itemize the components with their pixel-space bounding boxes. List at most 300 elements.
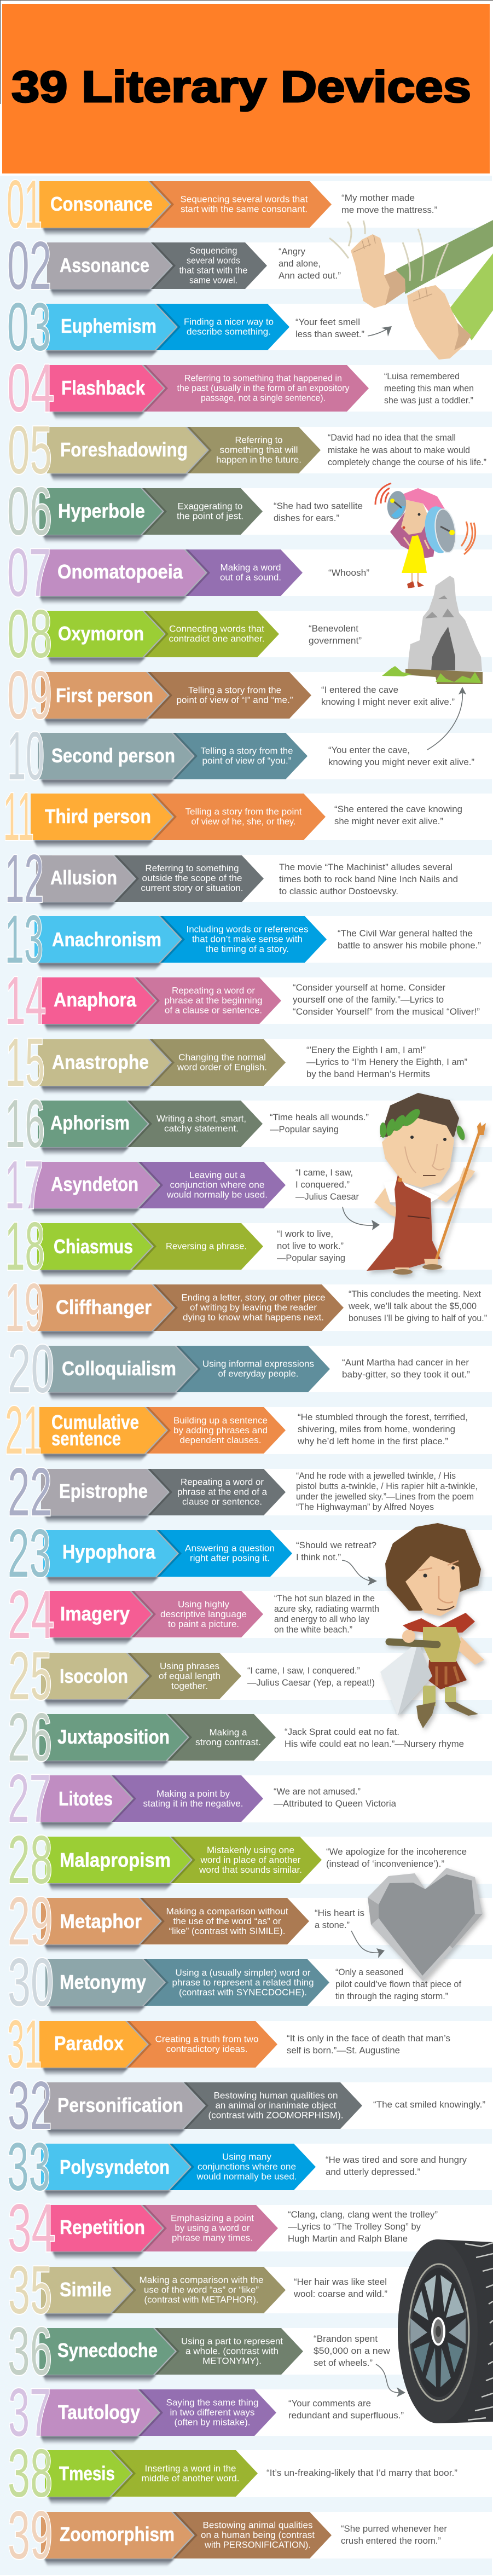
arrow: cave bbox=[427, 687, 466, 750]
term arrow 02 bbox=[47, 242, 173, 289]
description arrow 17 bbox=[137, 1162, 286, 1208]
row 04: Flashback bbox=[7, 351, 474, 426]
quote 33: “He was tired and sore and hungry bbox=[326, 2155, 467, 2165]
description arrow 20: of everyday people. bbox=[218, 1368, 299, 1379]
description arrow 04: passage, not a single sentence). bbox=[201, 393, 326, 403]
description arrow 21: Building up a sentence bbox=[173, 1415, 268, 1426]
quote 25: —Julius Caesar (Yep, a repeat!) bbox=[247, 1677, 375, 1688]
quote 03: “Your feet smell bbox=[295, 317, 360, 327]
quote 04: she was just a toddler.” bbox=[384, 395, 473, 406]
row 20: Colloquialism bbox=[8, 1332, 470, 1407]
number 37: 37 bbox=[8, 2375, 51, 2451]
term arrow 12 bbox=[36, 855, 136, 902]
row 17: Asyndeton bbox=[5, 1148, 359, 1223]
row 33: Polysyndeton bbox=[7, 2129, 467, 2205]
row 35: Simile bbox=[8, 2253, 387, 2328]
term arrow 24: Imagery bbox=[60, 1602, 130, 1625]
description arrow 08: Connecting words that bbox=[169, 624, 264, 634]
term arrow 24 bbox=[49, 1591, 153, 1637]
quote 27 bbox=[274, 1786, 397, 1809]
description arrow 09 bbox=[146, 672, 311, 719]
description arrow 36: a whole. (contrast with bbox=[185, 2346, 279, 2357]
description arrow 31: contradictory ideas. bbox=[166, 2044, 247, 2054]
description arrow 11: Telling a story from the point bbox=[185, 807, 302, 817]
quote 08 bbox=[309, 623, 362, 646]
description arrow 15: Changing the normal bbox=[178, 1052, 266, 1063]
quote 34: “Clang, clang, clang went the trolley” bbox=[288, 2209, 438, 2220]
quote 22: “And he rode with a jewelled twinkle, / His bbox=[296, 1471, 456, 1481]
term arrow 37 bbox=[37, 2389, 160, 2436]
quote 23: “Should we retreat? bbox=[296, 1540, 376, 1550]
description arrow 30: (contrast with SYNECDOCHE). bbox=[179, 1987, 307, 1998]
row 11: Third person: 11 bbox=[3, 779, 34, 855]
quote 30 bbox=[335, 1967, 461, 2001]
quote 22: pistol butts a-twinkle, / His rapier hilt a-twinkle, bbox=[296, 1481, 478, 1491]
quote 04: “Luisa remembered bbox=[384, 371, 460, 381]
quote 01: “My mother made bbox=[341, 193, 415, 203]
description arrow 29: “like” (contrast with SIMILE). bbox=[169, 1926, 286, 1936]
number 17: 17 bbox=[5, 1148, 43, 1223]
term arrow 10: Second person bbox=[51, 744, 175, 767]
description arrow 21: dependent clauses. bbox=[179, 1435, 262, 1445]
quote 17: —Julius Caesar bbox=[295, 1191, 359, 1202]
quote 34: Hugh Martin and Ralph Blane bbox=[288, 2233, 408, 2244]
description arrow 28 bbox=[169, 1837, 322, 1883]
quote 21: why he’d left home in the first place.” bbox=[297, 1436, 448, 1446]
quote 15: by the band Herman’s Hermits bbox=[306, 1069, 430, 1079]
row 34: Repetition bbox=[8, 2191, 438, 2266]
quote 03: less than sweet.” bbox=[295, 329, 364, 339]
row 28: Malapropism bbox=[8, 1822, 467, 1898]
quote 35 bbox=[293, 2277, 387, 2299]
illustration: soldier with sword bbox=[380, 1523, 484, 1728]
quote 12: The movie “The Machinist” alludes several bbox=[279, 862, 453, 872]
description arrow 25 bbox=[126, 1653, 241, 1699]
quote 20: “Aunt Martha had cancer in her bbox=[342, 1357, 469, 1368]
quote 29 bbox=[315, 1908, 364, 1930]
description arrow 01: Sequencing several words that bbox=[181, 194, 308, 205]
quote 10 bbox=[328, 745, 474, 767]
quote 27: “We are not amused.” bbox=[274, 1786, 361, 1797]
description arrow 03 bbox=[154, 304, 289, 350]
quote 05: completely change the course of his life.” bbox=[328, 457, 486, 467]
quote 17: I conquered.” bbox=[295, 1179, 350, 1190]
quote 16 bbox=[270, 1112, 369, 1134]
description arrow 14: of a clause or sentence. bbox=[165, 1005, 262, 1016]
quote 15: —Lyrics to “I’m Henery the Eighth, I am” bbox=[306, 1057, 467, 1067]
term arrow 08 bbox=[45, 611, 166, 657]
quote 39: crush entered the room.” bbox=[341, 2536, 441, 2546]
description arrow 15: word order of English. bbox=[177, 1062, 267, 1073]
row 15: Anastrophe bbox=[5, 1025, 467, 1101]
description arrow 26: strong contrast. bbox=[195, 1737, 261, 1747]
number 18: 18 bbox=[5, 1209, 45, 1284]
description arrow 12: Referring to something bbox=[146, 863, 239, 873]
row 21: Cumulative sentence bbox=[5, 1393, 468, 1468]
description arrow 30: phrase to represent a related thing bbox=[172, 1977, 314, 1988]
term arrow 25 bbox=[41, 1653, 149, 1699]
term arrow 09 bbox=[41, 672, 170, 719]
description arrow 13 bbox=[159, 916, 327, 963]
number 23: 23 bbox=[8, 1516, 51, 1591]
description arrow 03: Finding a nicer way to bbox=[184, 316, 274, 327]
description arrow 22: phrase at the end of a bbox=[177, 1486, 268, 1497]
quote 37: redundant and superfluous.” bbox=[288, 2410, 404, 2421]
description arrow 33: would normally be used. bbox=[196, 2172, 297, 2181]
number 35: 35 bbox=[8, 2253, 52, 2328]
quote 05 bbox=[328, 432, 486, 467]
quote 12 bbox=[279, 862, 458, 896]
row 07: Onomatopoeia bbox=[7, 535, 369, 611]
term arrow 29 bbox=[41, 1898, 162, 1944]
quote 35: “Her hair was like steel bbox=[294, 2277, 387, 2287]
row 24: Imagery bbox=[8, 1577, 379, 1653]
quote 29: “His heart is bbox=[315, 1908, 364, 1918]
quote 36: “Brandon spent bbox=[314, 2334, 378, 2344]
description arrow 32 bbox=[182, 2082, 362, 2129]
number 12: 12 bbox=[5, 841, 44, 917]
quote 36 bbox=[314, 2334, 391, 2368]
arrow: tire bbox=[376, 2364, 405, 2397]
description arrow 37 bbox=[137, 2389, 276, 2436]
row 31: Paradox bbox=[7, 2007, 450, 2082]
row 09: First person bbox=[7, 658, 455, 733]
term arrow 19 bbox=[37, 1284, 175, 1331]
term arrow 39: Zoomorphism bbox=[60, 2523, 175, 2545]
quote 12: to classic author Dostoevsky. bbox=[279, 886, 398, 896]
description arrow 24 bbox=[130, 1591, 263, 1637]
term arrow 32: Personification bbox=[57, 2094, 183, 2116]
description arrow 06: Exaggerating to bbox=[177, 501, 243, 511]
row 39: Zoomorphism bbox=[8, 2498, 447, 2573]
row 22: Epistrophe bbox=[8, 1455, 478, 1530]
quote 20: baby-gitter, so they took it out.” bbox=[342, 1369, 470, 1380]
quote 24 bbox=[274, 1593, 379, 1635]
number 33: 33 bbox=[7, 2129, 50, 2205]
description arrow 29: Making a comparison without bbox=[166, 1906, 288, 1917]
term arrow 36 bbox=[39, 2328, 177, 2375]
term arrow 03: Euphemism bbox=[61, 315, 156, 337]
description arrow 13: that don’t make sense with bbox=[192, 934, 303, 945]
number 06: 06 bbox=[7, 474, 52, 549]
term arrow 01 bbox=[39, 181, 171, 228]
description arrow 39 bbox=[171, 2512, 332, 2558]
description arrow 10: Telling a story from the bbox=[200, 745, 293, 756]
description arrow 23 bbox=[155, 1530, 292, 1577]
number 29: 29 bbox=[8, 1884, 53, 1959]
term arrow 33: Polysyndeton bbox=[60, 2156, 170, 2178]
row 05: Foreshadowing bbox=[8, 413, 486, 488]
quote 25: “I came, I saw, I conquered.” bbox=[247, 1665, 360, 1676]
term arrow 01: Consonance bbox=[50, 193, 153, 215]
description arrow 35: use of the word “as” or “like” bbox=[144, 2284, 259, 2295]
description arrow 19: of writing by leaving the reader bbox=[190, 1303, 317, 1312]
description arrow 25: Using phrases bbox=[160, 1661, 219, 1671]
number 04: 04 bbox=[7, 351, 54, 426]
description arrow 20 bbox=[175, 1346, 330, 1392]
quote 09: knowing I might never exit alive.” bbox=[321, 697, 455, 707]
description arrow 34 bbox=[141, 2205, 278, 2251]
description arrow 24: descriptive language bbox=[160, 1609, 247, 1619]
description arrow 11 bbox=[150, 794, 326, 840]
description arrow 38 bbox=[109, 2450, 258, 2497]
description arrow 22: clause or sentence. bbox=[182, 1496, 262, 1507]
term arrow 04 bbox=[49, 365, 165, 412]
quote 20 bbox=[342, 1357, 470, 1380]
description arrow 34: Emphasizing a point bbox=[171, 2213, 254, 2223]
description arrow 08 bbox=[142, 611, 279, 657]
term arrow 28: Malapropism bbox=[60, 1849, 171, 1871]
row 14: Anaphora bbox=[5, 963, 480, 1039]
quote 23 bbox=[296, 1540, 376, 1562]
term arrow 35 bbox=[41, 2267, 134, 2313]
row 23: Hypophora bbox=[8, 1516, 376, 1591]
quote 28: (instead of ‘inconvenience’).” bbox=[326, 1859, 444, 1869]
description arrow 27: stating it in the negative. bbox=[143, 1798, 243, 1809]
term arrow 28 bbox=[45, 1837, 193, 1883]
term arrow 16: Aphorism bbox=[50, 1112, 130, 1134]
quote 35: wool: coarse and wild.” bbox=[293, 2289, 387, 2299]
term arrow 36: Synecdoche bbox=[57, 2339, 158, 2361]
term arrow 23: Hypophora bbox=[62, 1541, 156, 1563]
quote 31: self is born.”—St. Augustine bbox=[287, 2045, 400, 2056]
quote 19: bonuses I’ll be giving to half of you.” bbox=[349, 1313, 487, 1323]
number 07: 07 bbox=[7, 535, 51, 611]
description arrow 14 bbox=[134, 977, 281, 1024]
quote 19: week, we’ll talk about the $5,000 bbox=[348, 1301, 477, 1311]
quote 24: azure sky, radiating warmth bbox=[274, 1604, 379, 1614]
description arrow 24: Using highly bbox=[178, 1599, 230, 1610]
number 28: 28 bbox=[8, 1822, 53, 1898]
quote 12: times both to rock band Nine Inch Nails and bbox=[279, 874, 458, 884]
quote 08: “Benevolent bbox=[309, 623, 358, 634]
row 01: Consonance: 01 bbox=[7, 167, 42, 242]
term arrow 20 bbox=[45, 1346, 198, 1392]
description arrow 04: the past (usually in the form of an expository bbox=[177, 383, 350, 393]
description arrow 37: (often by mistake). bbox=[174, 2417, 251, 2428]
description arrow 32: Bestowing human qualities on bbox=[213, 2091, 338, 2100]
term arrow 25: Isocolon bbox=[60, 1665, 128, 1687]
description arrow 29 bbox=[138, 1898, 309, 1944]
number 27: 27 bbox=[8, 1761, 51, 1837]
description arrow 04 bbox=[142, 365, 369, 412]
illustration: tire bbox=[398, 2239, 493, 2423]
description arrow 06 bbox=[141, 488, 263, 535]
term arrow 21: Cumulative bbox=[51, 1411, 139, 1433]
term arrow 14 bbox=[41, 977, 157, 1024]
description arrow 21: by adding phrases and bbox=[173, 1425, 268, 1435]
illustration: Julius Caesar bbox=[367, 1093, 486, 1275]
quote 16: “Time heals all wounds.” bbox=[270, 1112, 369, 1122]
description arrow 03: describe something. bbox=[187, 326, 271, 337]
quote 30: “Only a seasoned bbox=[335, 1967, 403, 1977]
quote 18: “I work to live, bbox=[277, 1229, 333, 1239]
quote 37 bbox=[288, 2398, 404, 2421]
term arrow 02: Assonance bbox=[60, 254, 149, 276]
term arrow 15: Anastrophe bbox=[52, 1051, 149, 1073]
description arrow 25: of equal length bbox=[159, 1671, 221, 1681]
quote 13 bbox=[338, 928, 481, 951]
quote 04: meeting this man when bbox=[384, 383, 474, 393]
quote 17: “I came, I saw, bbox=[295, 1167, 353, 1178]
term arrow 26: Juxtaposition bbox=[57, 1726, 170, 1748]
description arrow 05: happen in the future. bbox=[216, 454, 301, 465]
quote 31: “It is only in the face of death that man’s bbox=[287, 2033, 450, 2044]
number 09: 09 bbox=[7, 658, 52, 733]
number 32: 32 bbox=[8, 2068, 52, 2144]
quote 08: government” bbox=[309, 635, 362, 646]
description arrow 22: Repeating a word or bbox=[181, 1477, 264, 1487]
term arrow 26 bbox=[39, 1714, 189, 1761]
description arrow 09: point of view of “I” and “me.” bbox=[176, 695, 293, 705]
description arrow 28: word that sounds similar. bbox=[199, 1865, 302, 1875]
description arrow 32: an animal or inanimate object bbox=[216, 2100, 337, 2110]
quote 26: His wife could eat no lean.”—Nursery rhyme bbox=[285, 1739, 464, 1749]
description arrow 17: conjunction where one bbox=[170, 1180, 265, 1190]
number 13: 13 bbox=[5, 902, 43, 977]
number 14: 14 bbox=[5, 963, 46, 1039]
term arrow 16 bbox=[38, 1101, 149, 1147]
description arrow 19: Ending a letter, story, or other piece bbox=[182, 1293, 325, 1303]
description arrow 30: Using a (usually simpler) word or bbox=[175, 1967, 311, 1978]
description arrow 04: Referring to something that happened in bbox=[184, 373, 342, 383]
quote 09 bbox=[321, 685, 455, 707]
description arrow 02: that start with the bbox=[179, 265, 247, 276]
row 36: Synecdoche bbox=[8, 2314, 391, 2389]
quote 18: —Popular saying bbox=[277, 1253, 345, 1263]
description arrow 28: Mistakenly using one bbox=[207, 1845, 294, 1855]
description arrow 13: Including words or references bbox=[186, 924, 309, 935]
description arrow 14: phrase at the beginning bbox=[164, 995, 263, 1006]
description arrow 35: (contrast with METAPHOR). bbox=[144, 2294, 258, 2305]
quote 39: “She purred whenever her bbox=[341, 2523, 447, 2534]
number 25: 25 bbox=[8, 1639, 52, 1714]
description arrow 32: (contrast with ZOOMORPHISM). bbox=[208, 2110, 344, 2120]
quote 01 bbox=[341, 193, 437, 215]
quote 26: “Jack Sprat could eat no fat. bbox=[285, 1727, 399, 1737]
description arrow 12 bbox=[113, 855, 264, 902]
quote 33: and utterly depressed.” bbox=[326, 2167, 420, 2177]
quote 34: —Lyrics to “The Trolley Song” by bbox=[288, 2221, 421, 2232]
quote 22: “The Highwayman” by Alfred Noyes bbox=[296, 1502, 434, 1512]
description arrow 22 bbox=[146, 1469, 286, 1515]
term arrow 29: Metaphor bbox=[60, 1910, 142, 1932]
quote 02: “Angry bbox=[279, 246, 305, 257]
description arrow 27: Making a point by bbox=[156, 1788, 230, 1799]
description arrow 06: the point of jest. bbox=[177, 511, 243, 521]
quote 19: “This concludes the meeting. Next bbox=[349, 1289, 481, 1299]
illustration: rock cave bbox=[382, 576, 483, 684]
quote 06: “She had two satellite bbox=[274, 501, 363, 511]
term arrow 34 bbox=[49, 2205, 164, 2251]
description arrow 12: outside the scope of the bbox=[142, 873, 242, 883]
term arrow 12: Allusion bbox=[50, 866, 117, 889]
arrow: feet bbox=[368, 326, 392, 337]
description arrow 33: conjunctions where one bbox=[198, 2162, 296, 2172]
number 15: 15 bbox=[5, 1025, 45, 1101]
row 18: Chiasmus bbox=[5, 1209, 345, 1284]
row 29: Metaphor bbox=[8, 1884, 364, 1959]
term arrow 17: Asyndeton bbox=[51, 1173, 138, 1195]
description arrow 37: Saying the same thing bbox=[166, 2397, 258, 2408]
description arrow 23: right after posing it. bbox=[190, 1553, 270, 1563]
row 01: Consonance bbox=[7, 167, 437, 242]
quote 31 bbox=[287, 2033, 450, 2056]
description arrow 09: Telling a story from the bbox=[188, 685, 281, 695]
description arrow 33 bbox=[168, 2144, 316, 2190]
quote 17 bbox=[295, 1167, 359, 1202]
term arrow 30: Metonymy bbox=[60, 1971, 146, 1993]
description arrow 38: Inserting a word in the bbox=[144, 2463, 236, 2474]
arrow: soldier bbox=[342, 1560, 377, 1585]
description arrow 18 bbox=[130, 1223, 263, 1270]
term arrow 18 bbox=[37, 1223, 154, 1270]
term arrow 23 bbox=[43, 1530, 179, 1577]
row 27: Litotes bbox=[8, 1761, 397, 1837]
number 39: 39 bbox=[8, 2498, 53, 2573]
row 08: Oxymoron bbox=[7, 597, 362, 672]
description arrow 26: Making a bbox=[209, 1727, 247, 1738]
description arrow 36: METONYMY). bbox=[202, 2355, 262, 2366]
description arrow 31: Creating a truth from two bbox=[155, 2034, 258, 2045]
description arrow 21 bbox=[144, 1407, 286, 1454]
description arrow 16: Writing a short, smart, bbox=[156, 1113, 246, 1124]
description arrow 13: the timing of a story. bbox=[206, 943, 289, 954]
quote 02: Ann acted out.” bbox=[279, 270, 341, 281]
quote 27: —Attributed to Queen Victoria bbox=[274, 1798, 397, 1809]
row 26: Juxtaposition bbox=[8, 1700, 464, 1775]
term arrow 31: Paradox bbox=[54, 2032, 124, 2054]
term arrow 27: Litotes bbox=[59, 1787, 113, 1810]
quote 33 bbox=[326, 2155, 467, 2177]
number 20: 20 bbox=[8, 1332, 54, 1407]
description arrow 30 bbox=[142, 1959, 329, 2006]
number 08: 08 bbox=[7, 597, 52, 672]
description arrow 34: phrase many times. bbox=[172, 2233, 253, 2243]
description arrow 25: together. bbox=[171, 1681, 208, 1691]
illustration: smelly feet bbox=[329, 220, 493, 360]
number 36: 36 bbox=[8, 2314, 52, 2389]
quote 32: “The cat smiled knowingly.” bbox=[373, 2099, 485, 2110]
description arrow 02 bbox=[149, 242, 267, 289]
row 13: Anachronism bbox=[5, 902, 481, 977]
quote 22 bbox=[296, 1471, 478, 1512]
term arrow 10 bbox=[38, 733, 195, 779]
description arrow 17: would normally be used. bbox=[166, 1190, 268, 1200]
number 38: 38 bbox=[8, 2436, 53, 2511]
quote 37: “Your comments are bbox=[288, 2398, 371, 2409]
quote 14: “Consider yourself at home. Consider bbox=[293, 982, 445, 993]
row 11: Third person bbox=[3, 779, 462, 855]
description arrow 17: Leaving out a bbox=[189, 1170, 246, 1180]
quote 10: “You enter the cave, bbox=[328, 745, 410, 755]
description arrow 02: several words bbox=[187, 255, 240, 266]
quote 06 bbox=[274, 501, 363, 523]
arrow: heart bbox=[351, 1931, 385, 1958]
illustration: girl with satellite-dish ears bbox=[375, 483, 475, 588]
term arrow 13: Anachronism bbox=[52, 928, 161, 951]
quote 30: tin through the raging storm.” bbox=[335, 1991, 448, 2001]
quote 04 bbox=[384, 371, 474, 406]
quote 26 bbox=[285, 1727, 464, 1749]
row 30: Metonymy bbox=[8, 1945, 461, 2021]
description arrow 05: something that will bbox=[220, 444, 298, 455]
quote 38: “It’s un-freaking-likely that I’d marry that boor.” bbox=[266, 2468, 457, 2478]
term arrow 38 bbox=[45, 2450, 133, 2497]
quote 23: I think not.” bbox=[296, 1552, 341, 1562]
quote 03 bbox=[295, 317, 364, 339]
number 19: 19 bbox=[5, 1270, 44, 1346]
